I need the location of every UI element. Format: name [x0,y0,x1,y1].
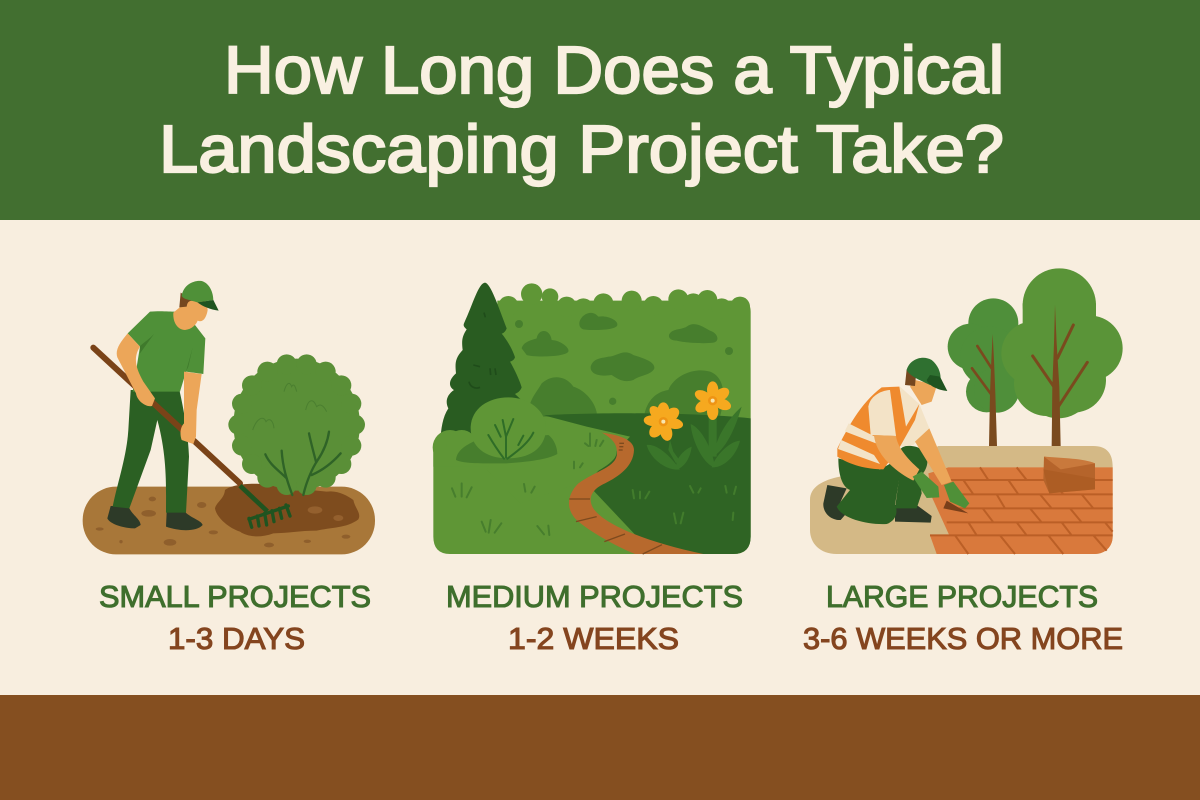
footer band [0,695,1200,800]
arms [117,333,155,406]
boots [823,485,847,520]
conifer tree [441,283,525,440]
distant shrubs [515,313,733,417]
kneeling worker [823,358,969,524]
cap [182,281,213,302]
trousers [837,446,927,524]
shirt [128,311,205,392]
illustration: medium project, garden with path and flowers [433,283,751,554]
label: large projects: LARGE PROJECTS [826,579,1098,614]
ground [83,487,375,554]
winding path [569,433,703,554]
boots [107,506,141,528]
title: How Long Does a Typical [224,33,1004,108]
stacked bricks [1043,457,1095,493]
brick paving [928,467,1113,554]
label: small projects [99,579,371,656]
tree left [948,298,1020,446]
head [910,380,936,405]
shrub with branches [456,397,557,463]
bush [228,354,365,495]
label: small projects: SMALL PROJECTS [99,579,371,614]
foreground lawn edge [433,422,617,503]
illustration: large project, worker laying brick paving [810,268,1123,554]
title: Landscaping Project Take? [159,112,1004,187]
label: large projects [803,579,1123,656]
trousers [113,390,189,513]
label: large projects: 3-6 WEEKS OR MORE [803,621,1123,656]
trowel [943,501,968,513]
head [173,295,208,330]
label: small projects: 1-3 DAYS [168,621,305,656]
gloves [913,472,939,498]
grass tufts [452,433,603,535]
soil mound [215,484,359,536]
sand base [810,446,1113,554]
label: medium projects: MEDIUM PROJECTS [446,579,743,614]
hedge and lawn background [433,283,751,554]
dark lawn [544,413,751,554]
safety vest [837,387,919,469]
arms [874,435,919,481]
worker with rake [93,281,290,530]
cap [907,358,941,385]
title [159,33,1004,187]
header band [0,0,1200,220]
label: medium projects: 1-2 WEEKS [508,621,679,656]
illustration: small project, man raking beside a bush [83,281,375,554]
shirt [868,387,929,447]
label: medium projects [446,579,743,656]
tree right [1001,268,1123,446]
rake [93,348,290,527]
flowers [643,381,742,470]
